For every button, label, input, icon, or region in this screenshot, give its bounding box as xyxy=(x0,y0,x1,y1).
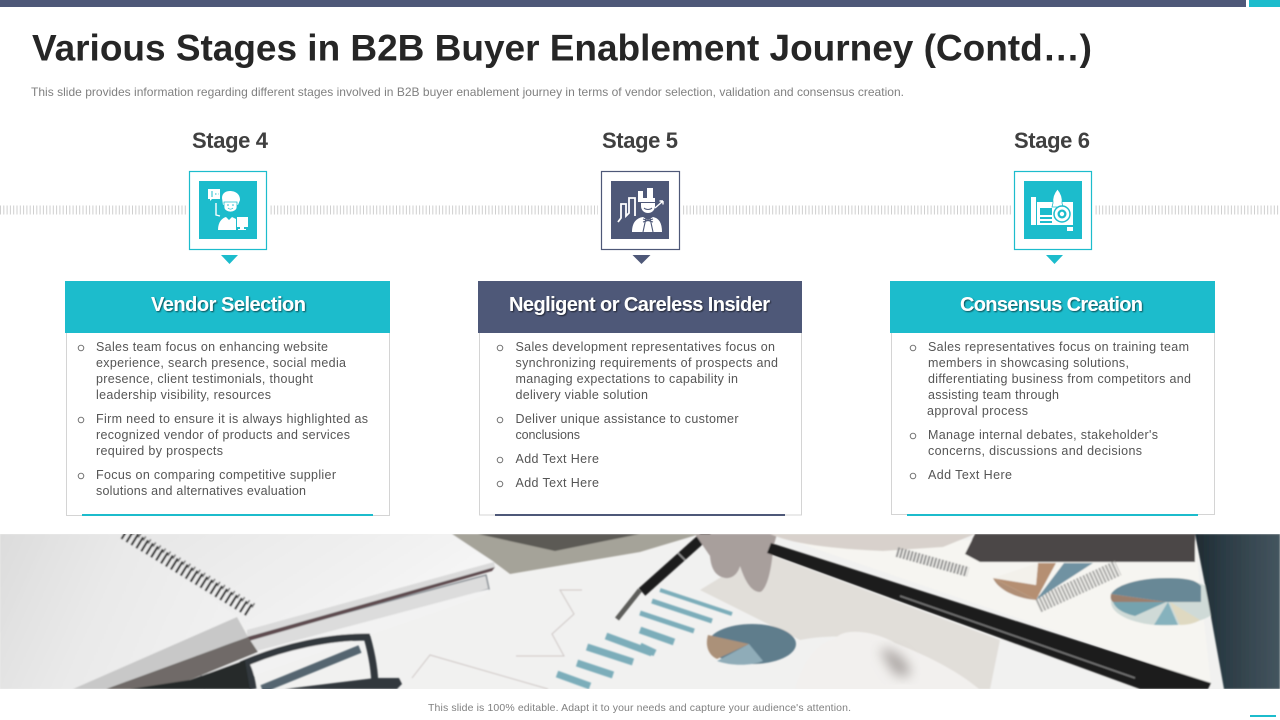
pen xyxy=(642,532,709,592)
chart line xyxy=(412,590,582,689)
bullet list: concerns, discussions and decisions xyxy=(928,444,1142,458)
bullet list: presence, client testimonials, thought xyxy=(96,372,314,386)
header: negligent or careless insider: Negligent or Careless Insider xyxy=(509,294,770,316)
bullet list xyxy=(78,340,368,498)
icon: businessman with growth chart xyxy=(602,172,680,250)
spiral binding xyxy=(124,533,252,612)
jacket xyxy=(1195,534,1280,689)
bullet list: conclusions xyxy=(516,428,580,442)
header: negligent or careless insider xyxy=(478,281,802,333)
footer note: This slide is 100% editable. Adapt it to your needs and capture your audience's attention. xyxy=(428,702,851,714)
bullet list: solutions and alternatives evaluation xyxy=(96,484,306,498)
writing hand fingers xyxy=(695,534,777,592)
bullet list: leadership visibility, resources xyxy=(96,388,271,402)
desk shadow top xyxy=(451,534,700,574)
footer accent xyxy=(1250,715,1276,717)
black ruler pen xyxy=(767,543,1211,689)
bullet list: Add Text Here xyxy=(928,468,1012,482)
title: Various Stages in B2B Buyer Enablement Journey (Contd…) xyxy=(32,28,1092,68)
shaded paper below the ruler xyxy=(700,552,1000,689)
pointer xyxy=(632,255,650,264)
bullet list: Focus on comparing competitive supplier xyxy=(96,468,336,482)
middle pie xyxy=(993,578,1036,600)
body card xyxy=(480,333,802,516)
center pie chart xyxy=(708,624,796,664)
body card xyxy=(66,333,390,516)
bullet list xyxy=(497,340,778,490)
pointer xyxy=(221,255,238,264)
pointer xyxy=(1046,255,1063,264)
dark sleeve xyxy=(965,534,1195,562)
bullet list: Sales representatives focus on training team xyxy=(928,340,1189,354)
photo: desk with notebook, glasses, pen and charts xyxy=(0,532,1280,689)
bullet list: Sales development representatives focus on xyxy=(516,340,775,354)
panel: stage 5 careless insider xyxy=(478,128,802,516)
top accent bar xyxy=(0,0,1280,7)
glasses xyxy=(245,637,375,689)
paper above the ruler xyxy=(896,539,1212,685)
bullet list: Firm need to ensure it is always highlighted as xyxy=(96,412,368,426)
stage 5 heading: Stage 5 xyxy=(602,128,678,153)
body card xyxy=(892,333,1214,516)
bullet list: Add Text Here xyxy=(516,452,599,466)
bullet list: members in showcasing solutions, xyxy=(928,356,1129,370)
header: consensus creation xyxy=(890,281,1215,333)
notebook lower pages xyxy=(200,574,490,676)
panel: stage 6 consensus creation xyxy=(890,128,1215,516)
stage 4 heading: Stage 4 xyxy=(192,128,269,153)
bullet list: Deliver unique assistance to customer xyxy=(516,412,738,426)
notebook right page xyxy=(129,534,494,616)
bullet list: assisting team through xyxy=(928,388,1059,402)
bullet list: Add Text Here xyxy=(516,476,599,490)
bullet list: approval process xyxy=(927,404,1028,418)
header: consensus creation: Consensus Creation xyxy=(960,294,1143,316)
far pie chart xyxy=(1110,583,1212,626)
notebook left page xyxy=(0,534,186,689)
panel: stage 4 vendor selection xyxy=(65,128,390,516)
stage 6 heading: Stage 6 xyxy=(1014,128,1090,153)
bullet list: Manage internal debates, stakeholder's xyxy=(928,428,1158,442)
icon: rocket, gear and devices xyxy=(1014,172,1092,250)
bullet list: required by prospects xyxy=(96,444,223,458)
printed text blocks xyxy=(897,552,968,572)
chart bars xyxy=(557,590,732,686)
header: vendor selection: Vendor Selection xyxy=(151,294,306,316)
bullet list: managing expectations to capability in xyxy=(516,372,738,386)
bullet list: synchronizing requirements of prospects and xyxy=(516,356,778,370)
bullet list: Sales team focus on enhancing website xyxy=(96,340,328,354)
bullet list xyxy=(910,340,1191,482)
subtitle: This slide provides information regarding different stages involved in B2B buyer enablement journey in terms of vendor selection, validation and consensus creation. xyxy=(31,85,904,99)
icon: sales agent with headset xyxy=(190,172,266,250)
foreground hand xyxy=(838,632,978,689)
header: vendor selection xyxy=(65,281,390,333)
bullet list: experience, search presence, social media xyxy=(96,356,346,370)
bullet list: delivery viable solution xyxy=(516,388,648,402)
bullet list: recognized vendor of products and services xyxy=(96,428,350,442)
bullet list: differentiating business from competitors and xyxy=(928,372,1191,386)
